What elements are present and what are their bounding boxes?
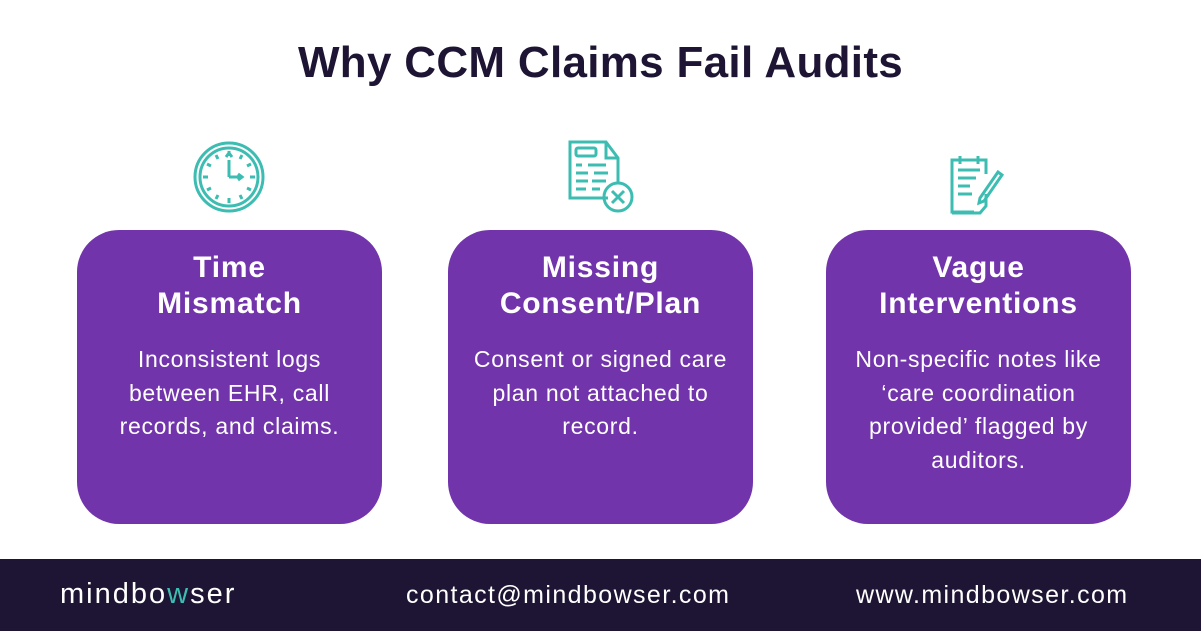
icon: document with x (568, 140, 634, 212)
card: vague interventions: provided’ flagged by (869, 413, 1088, 439)
card: time mismatch (77, 230, 382, 524)
card: missing consent/plan: Consent/Plan (500, 287, 701, 320)
card: vague interventions: Interventions (879, 287, 1078, 320)
icon: notepad with pencil (950, 156, 1004, 214)
website: www.mindbowser.com (856, 581, 1129, 609)
card: vague interventions: Non-specific notes like (855, 346, 1102, 372)
card: time mismatch: Mismatch (157, 287, 302, 320)
card: missing consent/plan (448, 230, 753, 524)
card: missing consent/plan: record. (562, 413, 639, 439)
card: vague interventions (826, 230, 1131, 524)
icon: clock (194, 142, 264, 212)
logo: mindbowser (60, 578, 236, 610)
card: time mismatch: records, and claims. (120, 413, 339, 439)
card: missing consent/plan: Consent or signed care (474, 346, 727, 372)
card: vague interventions: Vague (932, 251, 1025, 284)
card: time mismatch: Time (193, 251, 266, 284)
email: contact@mindbowser.com (406, 581, 730, 609)
title: Why CCM Claims Fail Audits (298, 38, 903, 87)
card: time mismatch: Inconsistent logs (138, 346, 321, 372)
card: missing consent/plan: Missing (542, 251, 659, 284)
card: time mismatch: between EHR, call (129, 380, 330, 406)
footer (0, 559, 1201, 631)
card: vague interventions: ‘care coordination (881, 380, 1076, 406)
card: missing consent/plan: plan not attached to (492, 380, 709, 406)
card: vague interventions: auditors. (931, 446, 1026, 472)
